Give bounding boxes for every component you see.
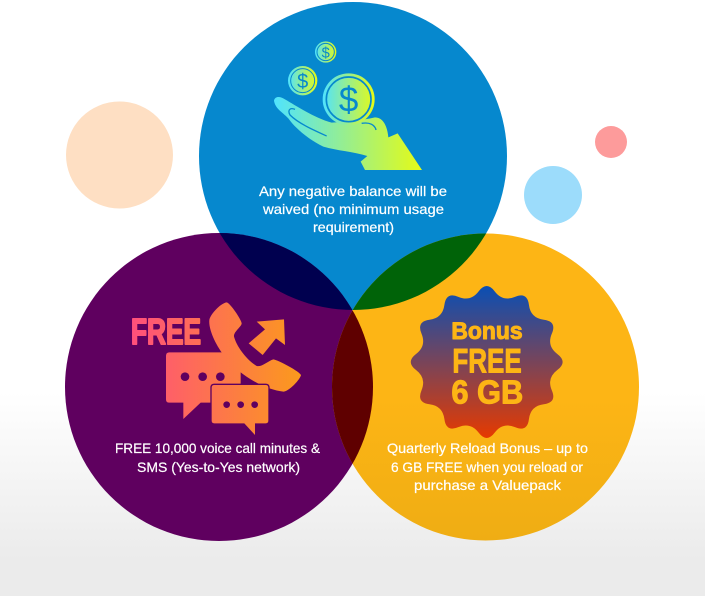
text: reload bonus: Quarterly Reload Bonus – up to [387,440,588,456]
icon: free calls and messages [131,302,301,435]
icon: bonus badge [411,286,563,438]
text: negative balance: Any negative balance will be [259,183,447,199]
icon: large speech bubble [166,352,241,419]
text: free minutes: FREE 10,000 voice call minutes & [115,440,321,456]
text: free minutes: SMS (Yes-to-Yes network) [137,459,300,475]
label: FREE: FREE [131,311,201,352]
panel: blue circle [199,2,507,310]
text: free minutes [115,440,321,475]
text: reload bonus: purchase a Valuepack [414,477,562,493]
decorative circle: peach [66,102,173,208]
overlap: blue and purple [220,233,352,310]
text: negative balance: requirement) [313,219,394,235]
icon: arrow [249,319,285,355]
panel: yellow circle [332,234,639,540]
panel: purple circle [65,233,373,541]
icon: hand with coins: $ [297,71,308,93]
text: negative balance: waived (no minimum usage [262,201,444,217]
icon: phone handset [209,302,301,392]
text: negative balance [259,183,447,235]
text: reload bonus: 6 GB FREE when you reload or [391,459,583,475]
badge text: Bonus [451,318,523,345]
badge shape [411,286,563,438]
badge text: 6 GB [451,374,523,411]
badge text [451,318,523,411]
icon: small speech bubble [212,385,268,435]
icon: hand with coins [274,41,422,170]
icon: hand with coins: $ [322,45,330,61]
badge text: FREE [452,342,522,380]
decorative circle: light blue [524,166,582,224]
icon: hand with coins: $ [339,81,358,120]
decorative circle: pink [595,126,627,158]
text: reload bonus [387,440,588,493]
overlap: blue and yellow [352,234,486,310]
overlap: purple and yellow [332,310,373,464]
